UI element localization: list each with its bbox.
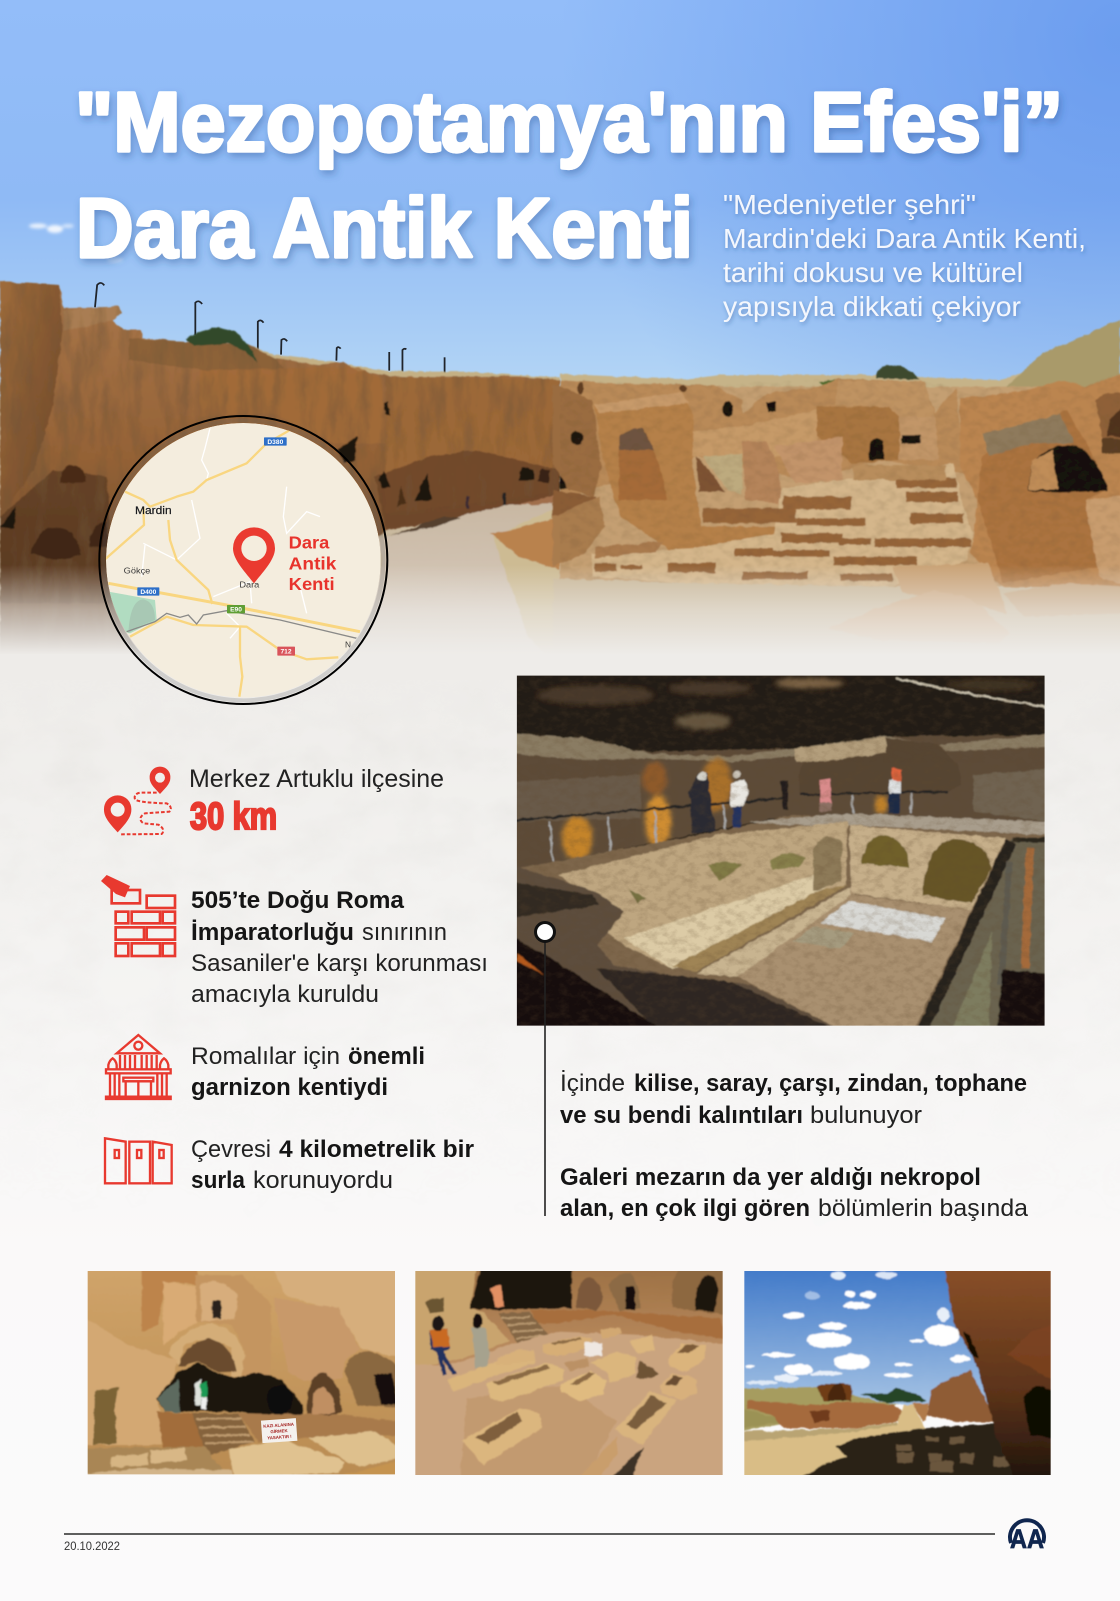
map label (289, 532, 337, 594)
dark opening (157, 1362, 303, 1415)
text: founding: 505’te Doğu Roma (191, 887, 404, 914)
lamp posts (95, 283, 445, 374)
photo: rock-cut tombs (407, 1265, 730, 1482)
subtitle text block: yapısıyla dikkati çekiyor (723, 291, 1021, 322)
logo: AA: AA (1010, 1524, 1044, 1554)
right railing (920, 838, 1051, 1032)
steps (157, 1412, 210, 1455)
ground and boulders (82, 1447, 232, 1482)
pit floor (510, 815, 1051, 1032)
text: founding: İmparatorluğu (191, 919, 354, 946)
canyon rock mass (0, 282, 560, 670)
text: remains in the city (560, 1070, 1027, 1129)
location map circle: N (345, 639, 351, 649)
icon: route between two pins (104, 767, 171, 834)
central floor and glass (696, 887, 972, 1032)
subtitle text block: tarihi dokusu ve kültürel (723, 257, 1023, 288)
boys (195, 1379, 201, 1405)
location map circle: Gökçe (124, 565, 151, 575)
callout line and marker (536, 922, 554, 1216)
place names: Mardin (135, 505, 172, 517)
sign: KAZI ALANINA (263, 1422, 295, 1429)
visitors (429, 1328, 457, 1377)
photo: carved church entrance (82, 1265, 402, 1482)
map label: Dara (289, 532, 330, 552)
text: necropolis: bölümlerin başında (818, 1195, 1028, 1222)
text: remains in the city: İçinde (560, 1070, 625, 1097)
title: second line: Dara Antik Kenti (76, 181, 693, 275)
text: city walls: 4 kilometrelik bir (279, 1136, 474, 1163)
sign: YASAKTIR ! (267, 1434, 292, 1440)
railing (510, 792, 947, 821)
shadow with tombs (792, 1423, 1023, 1482)
icon: map pin (233, 527, 275, 583)
foreground rock and rail (510, 865, 844, 1032)
text: founding: Sasaniler'e karşı korunması (191, 950, 488, 977)
text: remains in the city: bulunuyor (810, 1102, 922, 1129)
text: remains in the city: ve su bendi kalıntıları (560, 1102, 803, 1129)
hero photo: Dara ruins under blue sky (0, 0, 1120, 680)
date: 20.10.2022 (64, 1541, 120, 1553)
tree on cliff (186, 327, 257, 363)
niches (307, 1372, 342, 1415)
main photo: underground necropolis gallery (510, 668, 1051, 1032)
visitors (689, 768, 902, 833)
icon: city walls (105, 1138, 172, 1183)
road badges: D380 (267, 439, 284, 446)
subtitle text block: Mardin'deki Dara Antik Kenti, (723, 223, 1086, 254)
text: city walls: Çevresi (191, 1136, 271, 1163)
left rock (82, 1315, 177, 1445)
panel: facts column (101, 765, 488, 1194)
small sign (585, 1342, 603, 1357)
clouds (745, 1271, 970, 1384)
far hill and ruins (737, 1387, 900, 1432)
left canyon wall (0, 280, 560, 670)
text: garrison: garnizon kentiydi (191, 1074, 388, 1101)
rock grain (0, 284, 554, 579)
caves (0, 401, 550, 560)
ruin base (559, 386, 1037, 588)
big pillar (594, 403, 776, 550)
icon: roman temple (106, 1035, 171, 1099)
boulders at foot (553, 578, 1120, 673)
icon: brick wall with trowel (101, 875, 175, 956)
back wall (510, 735, 1051, 872)
subtitle text block (723, 189, 1086, 322)
overhanging cliff (944, 1265, 1057, 1482)
left column (553, 383, 601, 497)
text: founding (191, 887, 488, 1008)
rock texture (560, 372, 1120, 587)
fade to paper (0, 565, 1120, 655)
text: garrison (191, 1043, 425, 1101)
sand road (737, 1405, 1017, 1482)
sky (0, 0, 1120, 400)
footer rule (64, 1533, 995, 1535)
text: distance label: Merkez Artuklu ilçesine (189, 765, 444, 793)
road badges: E90 (230, 607, 242, 614)
map label: Antik (289, 553, 337, 573)
map label: Kenti (289, 574, 335, 594)
text: necropolis: Galeri mezarın da yer aldığı nekropol (560, 1164, 981, 1191)
text: city walls: surla (191, 1167, 245, 1194)
text: city walls: korunuyordu (253, 1167, 393, 1194)
text: 30 km: 30 km (190, 796, 277, 838)
far ground and grass hill (559, 372, 1022, 389)
photo grain (517, 676, 1045, 1026)
sign (261, 1418, 297, 1443)
text: necropolis: alan, en çok ilgi gören (560, 1195, 810, 1222)
steps (498, 1312, 553, 1347)
text: garrison: Romalılar için (191, 1043, 340, 1070)
long vaulted wall (558, 822, 848, 968)
openings (470, 1265, 572, 1310)
location map circle (99, 416, 387, 704)
hero ground base (0, 400, 1042, 622)
back wall with arches (849, 825, 1006, 910)
right rock with cave (960, 372, 1120, 587)
arched tomb openings (560, 382, 921, 490)
right ruins (551, 320, 1120, 623)
ground (407, 1332, 730, 1482)
far rock (927, 1370, 997, 1422)
text: founding: amacıyla kuruldu (191, 981, 379, 1008)
photo: canyon and sky (737, 1265, 1057, 1482)
sand path (352, 502, 554, 649)
sarcophagi (447, 1327, 706, 1482)
text: remains in the city: kilise, saray, çarşı, zindan, tophane (634, 1070, 1027, 1097)
wall lights (562, 758, 888, 860)
text: necropolis (560, 1164, 1028, 1222)
location map circle: Dara (239, 579, 260, 589)
road badges (137, 437, 295, 656)
paper texture (0, 640, 1120, 1240)
sign: GİRMEK (270, 1428, 289, 1434)
text: city walls (191, 1136, 474, 1194)
subtitle text block: "Medeniyetler şehri" (723, 189, 976, 220)
text: garrison: önemli (348, 1043, 425, 1070)
road badges: 712 (280, 648, 292, 655)
road badges: D400 (140, 589, 157, 596)
text: founding: sınırının (362, 919, 447, 946)
terrace steps (592, 463, 972, 587)
carved arch (168, 1323, 245, 1377)
back tiers of carved rock (560, 378, 964, 500)
title: first line: "Mezopotamya'nın Efes'i” (75, 75, 1063, 169)
